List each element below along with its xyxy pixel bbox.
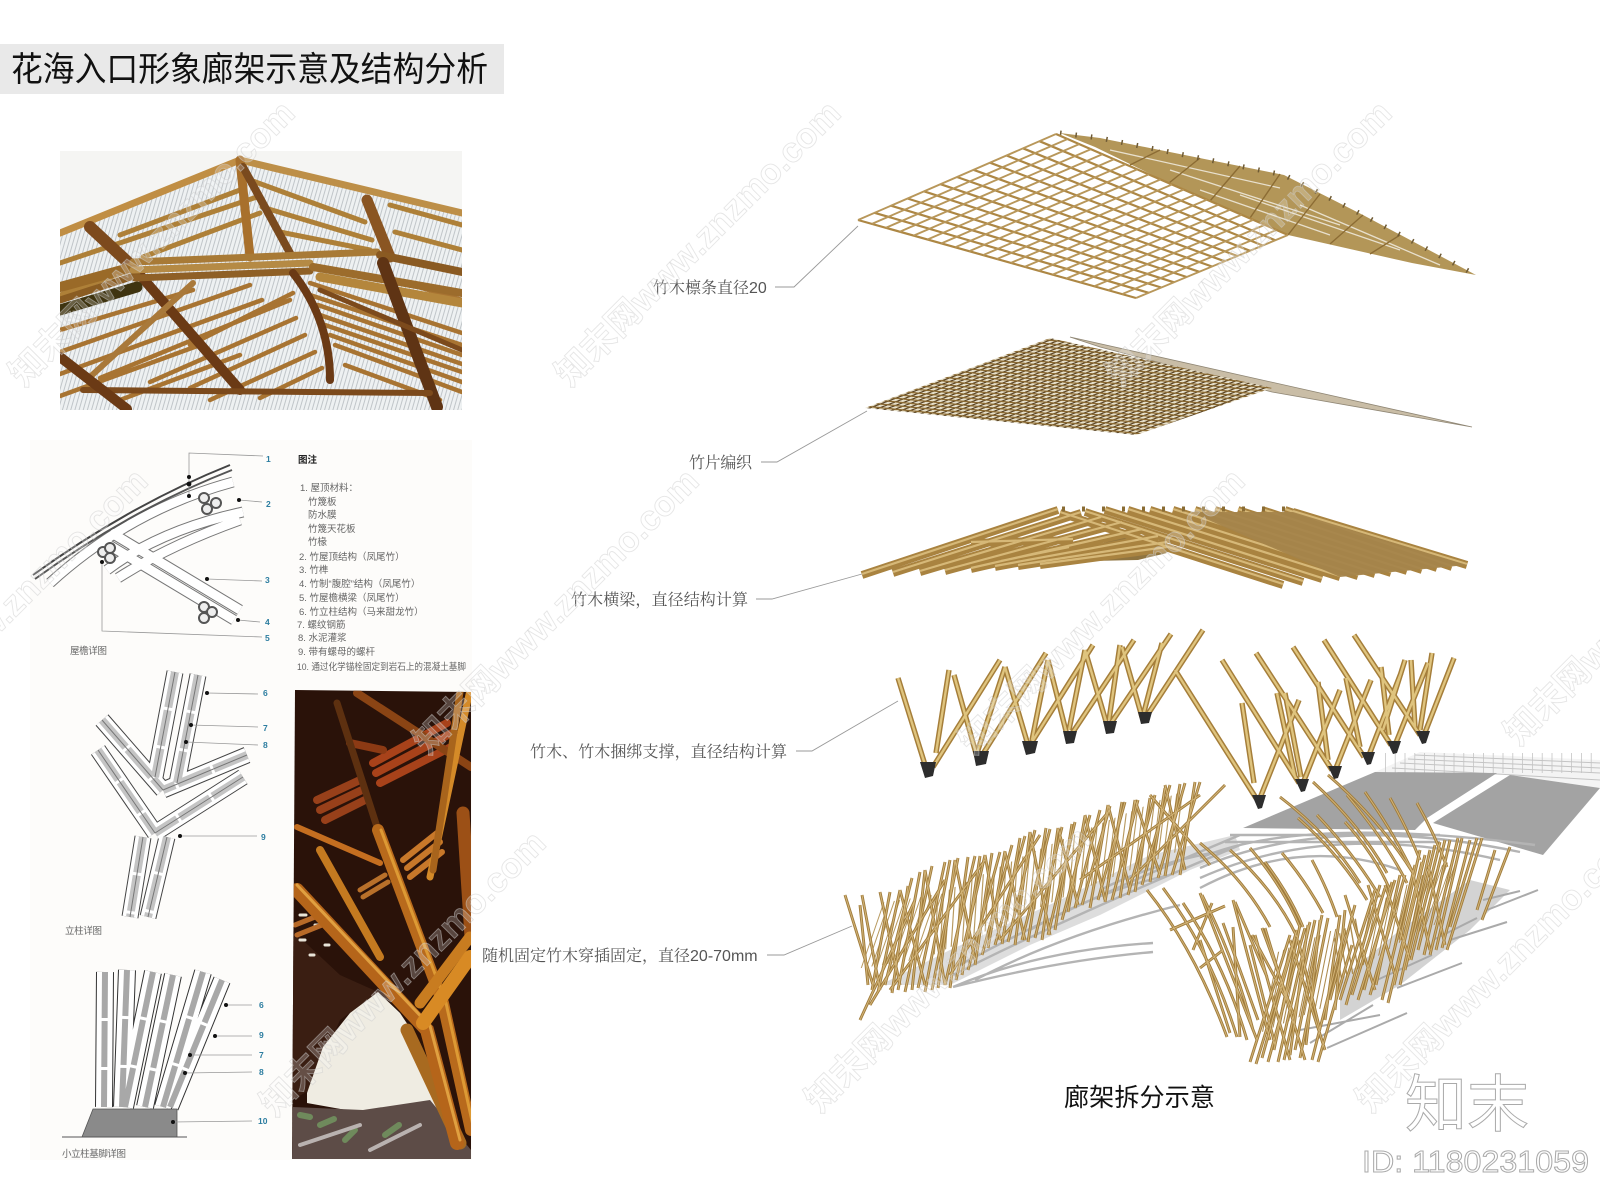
callout numbers: 5 <box>265 633 270 643</box>
right arch and V bundle sticks <box>1147 775 1510 1064</box>
left arch sticks <box>845 782 1225 1020</box>
column detail drawing: 8 <box>263 740 268 750</box>
id watermark: ID: 1180231059 <box>1362 1144 1589 1179</box>
callout numbers: 4 <box>265 617 270 627</box>
legend: 防水膜 <box>308 509 337 521</box>
callout numbers: 3 <box>265 575 270 585</box>
diagonal watermarks: 知末网www.znzmo.com <box>548 93 848 394</box>
label: purlins <box>653 226 858 297</box>
legend: 竹椽 <box>308 536 328 548</box>
diagonal watermarks: 知末网www.znzmo.com <box>253 823 553 1124</box>
layer 5: randomly inserted bamboo sticks <box>845 775 1510 1064</box>
column base detail drawing <box>62 970 268 1137</box>
label: cross beams: 竹木横梁，直径结构计算 <box>571 590 748 609</box>
legend: 6. 竹立柱结构（马来甜龙竹） <box>299 606 424 618</box>
scan background of reference drawings <box>30 440 472 1160</box>
far slope of roof <box>1060 133 1476 275</box>
layer 3: bamboo cross beams <box>862 509 1467 585</box>
legend: 10. 通过化学锚栓固定到岩石上的混凝土基脚 <box>297 661 466 673</box>
layer 2: woven bamboo sheet <box>865 337 1472 435</box>
caption: eave detail: 屋檐详图 <box>70 645 107 657</box>
eave detail drawing <box>33 453 271 643</box>
diagonal watermarks: 知末网www.znzmo.com <box>952 461 1252 762</box>
column detail drawing: 6 <box>263 688 268 698</box>
legend: 5. 竹屋檐横梁（凤尾竹） <box>299 592 405 604</box>
column base detail drawing: 10 <box>258 1116 268 1126</box>
legend <box>297 454 466 673</box>
callout numbers: 2 <box>266 499 271 509</box>
legend: 图注 <box>298 454 318 466</box>
label: inserted sticks <box>482 926 852 965</box>
column base detail drawing: 9 <box>259 1030 264 1040</box>
caption: column detail: 立柱详图 <box>65 925 102 937</box>
shadows on ground <box>880 752 1600 1048</box>
label: tied supports <box>530 701 898 761</box>
legend: 竹篾板 <box>308 496 337 508</box>
legend: 8. 水泥灌浆 <box>298 632 347 644</box>
triple bamboo sections <box>98 493 221 623</box>
label: purlins: 竹木檩条直径20 <box>653 279 767 297</box>
legend: 1. 屋顶材料： <box>300 482 358 494</box>
layer 1: bamboo purlin grid <box>858 133 1476 298</box>
roof layer curve <box>33 465 230 575</box>
legend: 3. 竹榫 <box>299 564 329 576</box>
title bar: 花海入口形象廊架示意及结构分析 <box>11 51 488 89</box>
legend: 7. 螺纹钢筋 <box>297 619 346 631</box>
photo: bamboo columns, dark interior <box>290 688 474 1161</box>
black foot connectors <box>920 712 1430 809</box>
caption: column base detail: 小立柱基脚详图 <box>62 1148 126 1160</box>
column base detail drawing: 7 <box>259 1050 264 1060</box>
diagonal watermarks: 知末网www.znzmo.com <box>1099 93 1399 394</box>
callout numbers <box>265 454 271 643</box>
column base detail drawing: 8 <box>259 1067 264 1077</box>
legend: 9. 带有螺母的螺杆 <box>298 646 376 658</box>
legend: 竹篾天花板 <box>308 523 356 535</box>
caption: exploded diagram: 廊架拆分示意 <box>1064 1084 1215 1112</box>
brand watermark: 知末 <box>1405 1071 1529 1140</box>
label: woven sheet <box>689 411 867 472</box>
diagonal watermarks: 知末网www.znzmo.com <box>406 461 706 762</box>
callout lines <box>102 453 263 637</box>
diagonal watermarks: 知末网www.znzmo.com <box>798 819 1098 1120</box>
layer 4: tied bamboo supports <box>898 630 1454 809</box>
legend: 4. 竹制“腹腔”结构（凤尾竹） <box>299 578 420 590</box>
column detail drawing: 9 <box>261 832 266 842</box>
legend: 2. 竹屋顶结构（凤尾竹） <box>299 551 405 563</box>
callout numbers: 1 <box>266 454 271 464</box>
label: inserted sticks: 随机固定竹木穿插固定，直径20-70mm <box>482 946 758 965</box>
label: tied supports: 竹木、竹木捆绑支撑，直径结构计算 <box>530 743 787 761</box>
column detail drawing: 7 <box>263 723 268 733</box>
label: cross beams <box>571 574 862 609</box>
column base detail drawing: 6 <box>259 1000 264 1010</box>
diagonal watermarks: 知末网www.znzmo.com <box>2 93 302 394</box>
label: woven sheet: 竹片编织 <box>689 454 753 472</box>
photo: bamboo roof structure from below <box>60 151 462 410</box>
column detail drawing <box>98 672 268 917</box>
